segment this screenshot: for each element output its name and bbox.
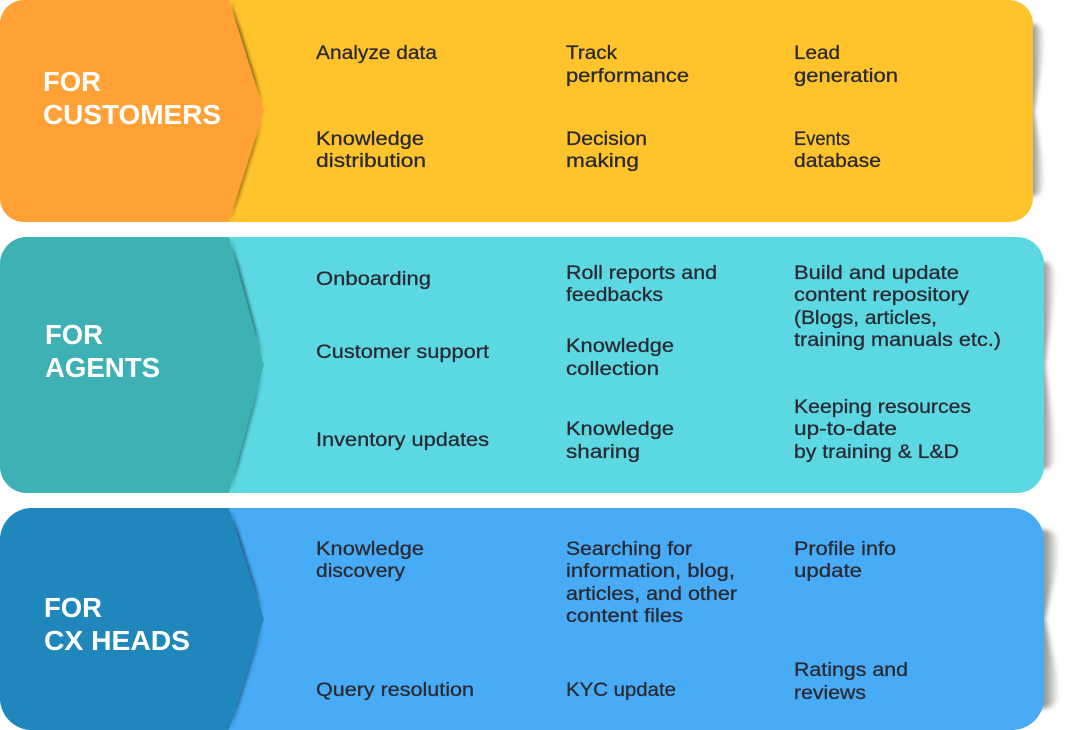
text: keeping resources up-to-date [794, 396, 971, 463]
heading: for cx heads: FOR [44, 592, 102, 623]
text: knowledge discovery: discovery [316, 560, 405, 582]
chevron shadow: customers [231, 0, 266, 222]
heading: for cx heads [44, 592, 190, 656]
text: knowledge distribution: distribution [316, 150, 426, 172]
text: lead generation: generation [794, 65, 898, 87]
text: knowledge distribution: Knowledge [316, 128, 424, 150]
chevron: customers [0, 0, 264, 222]
text: searching for information: information, blog, [566, 560, 735, 582]
chevron: cx heads [0, 508, 264, 730]
heading: for agents: AGENTS [45, 352, 160, 383]
heading: for customers [43, 66, 221, 130]
text: query resolution: Query resolution [316, 679, 474, 701]
text: build and update content repository: training manuals etc.) [794, 329, 1001, 351]
text: lead generation [794, 42, 898, 87]
text: kyc update: KYC update [566, 679, 676, 701]
text: track performance: performance [566, 65, 689, 87]
text: lead generation: Lead [794, 42, 840, 64]
text: ratings and reviews: Ratings and [794, 659, 908, 681]
text: ratings and reviews: reviews [794, 682, 866, 704]
text: keeping resources up-to-date: Keeping resources [794, 396, 971, 418]
text: searching for information: content files [566, 605, 683, 627]
text: roll reports and feedbacks [566, 262, 717, 306]
text: knowledge discovery: Knowledge [316, 538, 424, 560]
text: decision making [566, 128, 647, 172]
heading: for customers: FOR [43, 66, 101, 97]
text: build and update content repository: (Blogs, articles, [794, 307, 937, 329]
chevron shadow: agents [231, 237, 266, 493]
chevron shadow: cx heads [231, 508, 266, 730]
text: build and update content repository: content repository [794, 284, 969, 306]
text: onboarding: Onboarding [316, 268, 431, 290]
text: searching for information: Searching for [566, 538, 693, 560]
text: customer support: Customer support [316, 341, 490, 363]
text: track performance: Track [566, 42, 617, 64]
text: profile info update: update [794, 560, 862, 582]
heading: for agents [45, 319, 160, 383]
text: build and update content repository [794, 262, 1001, 351]
text: searching for information [566, 538, 738, 627]
text: keeping resources up-to-date: by training & L&D [794, 441, 959, 463]
text: track performance [566, 42, 689, 87]
panel background: cx heads [0, 508, 1044, 730]
text: decision making: making [566, 150, 639, 172]
panel shadow: customers [1028, 24, 1044, 196]
panel background: agents [0, 237, 1044, 493]
text: build and update content repository: Build and update [794, 262, 959, 284]
text: searching for information: articles, and other [566, 583, 738, 605]
panel: for agents [0, 237, 1055, 493]
panel: for customers [0, 0, 1044, 222]
heading: for agents: FOR [45, 319, 103, 350]
heading: for cx heads: CX HEADS [44, 625, 190, 656]
text: roll reports and feedbacks: feedbacks [566, 284, 663, 306]
text: profile info update [794, 538, 896, 582]
text: roll reports and feedbacks: Roll reports and [566, 262, 717, 284]
text: knowledge sharing [566, 418, 674, 463]
text: events database: Events [794, 128, 850, 150]
chevron: agents [0, 237, 264, 493]
panel shadow: agents [1039, 262, 1055, 469]
text: events database [794, 128, 881, 172]
panel shadow: cx heads [1039, 530, 1059, 708]
text: knowledge sharing: sharing [566, 441, 640, 463]
text: knowledge distribution [316, 128, 426, 172]
text: knowledge collection: collection [566, 358, 659, 380]
text: ratings and reviews [794, 659, 908, 704]
text: knowledge sharing: Knowledge [566, 418, 674, 440]
text: decision making: Decision [566, 128, 647, 150]
heading: for customers: CUSTOMERS [43, 99, 221, 130]
text: profile info update: Profile info [794, 538, 896, 560]
text: analyze data: Analyze data [316, 42, 437, 64]
text: knowledge collection [566, 335, 674, 380]
panel background: customers [0, 0, 1033, 222]
text: inventory updates: Inventory updates [316, 429, 489, 451]
panel: for cx heads [0, 508, 1059, 730]
text: knowledge discovery [316, 538, 424, 582]
text: keeping resources up-to-date: up-to-date [794, 418, 897, 440]
text: events database: database [794, 150, 881, 172]
text: knowledge collection: Knowledge [566, 335, 674, 357]
